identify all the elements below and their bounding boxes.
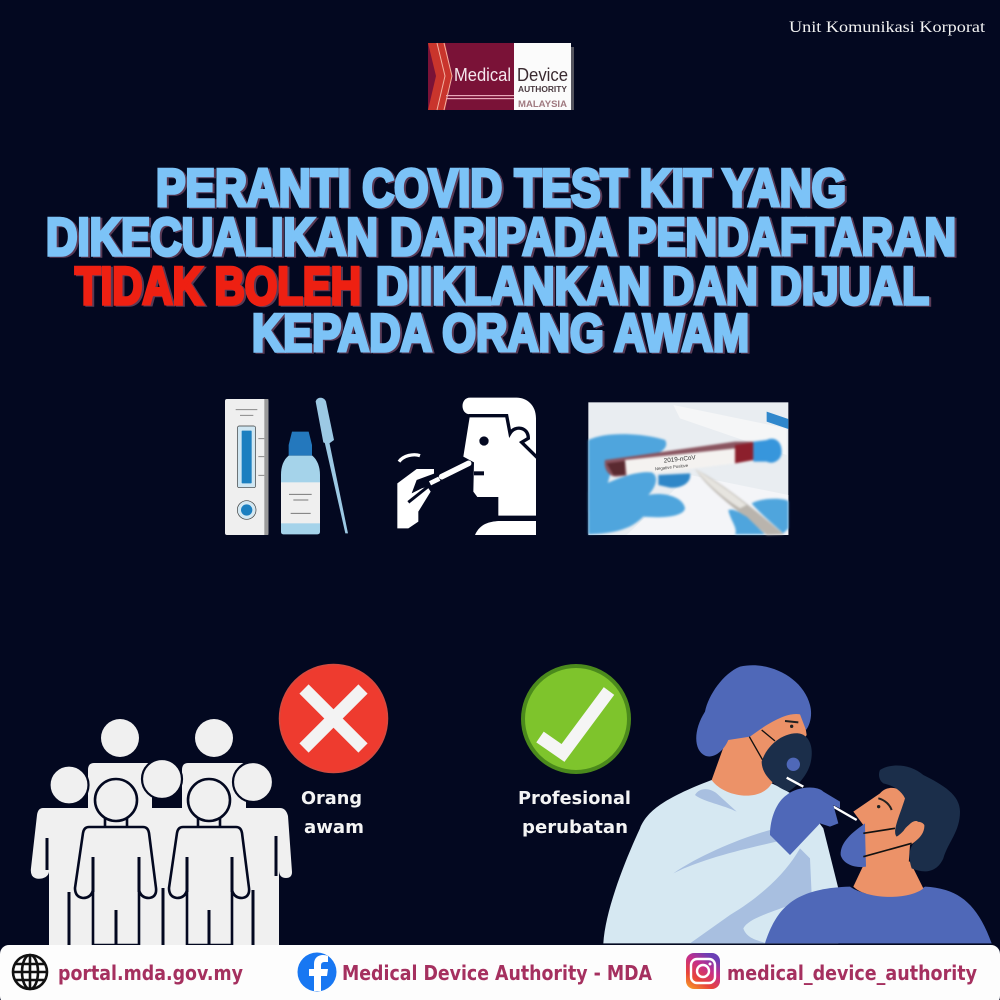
icon: group of people (public) — [31, 719, 292, 945]
footer bar — [0, 945, 1000, 1000]
front row people — [75, 779, 249, 945]
icon: person with nasal swab — [397, 398, 537, 535]
website text: portal.mda.gov.my — [58, 961, 243, 985]
icon: red cross — [280, 664, 388, 772]
medical professional — [603, 665, 857, 943]
logo: Medical Device Authority: MALAYSIA — [518, 99, 568, 109]
title — [46, 159, 956, 363]
label: Orang awam: Orang — [301, 788, 362, 809]
icon: test kit cassette, bottle and dropper — [225, 398, 348, 535]
icon: globe — [13, 955, 47, 989]
logo: Medical Device Authority: Device — [517, 65, 568, 85]
logo: Medical Device Authority — [428, 43, 574, 110]
photo: gloved hands holding 2019-nCoV blood tube — [588, 402, 788, 535]
header credit text: Unit Komunikasi Korporat — [789, 19, 986, 36]
title: PERANTI COVID TEST KIT YANG — [156, 159, 846, 218]
label: Orang awam — [301, 788, 364, 838]
icon: green check — [523, 666, 629, 772]
logo: Medical Device Authority: Medical — [454, 65, 511, 85]
title: TIDAK BOLEH — [75, 257, 361, 316]
label: Profesional perubatan: perubatan — [522, 817, 628, 838]
label: Profesional perubatan — [518, 788, 631, 838]
facebook text: Medical Device Authority - MDA — [342, 961, 652, 985]
label: Profesional perubatan: Profesional — [518, 788, 631, 809]
photo: gloved hands holding 2019-nCoV blood tube: 2019-nCoV — [663, 454, 697, 465]
middle row people — [31, 759, 292, 945]
patient — [765, 765, 992, 943]
title: KEPADA ORANG AWAM — [252, 304, 749, 363]
label: Orang awam: awam — [304, 817, 364, 838]
icon: facebook — [298, 952, 336, 992]
logo: Medical Device Authority: AUTHORITY — [518, 85, 568, 94]
icon: instagram — [686, 953, 720, 989]
photo: gloved hands holding 2019-nCoV blood tube: Negative Positive — [655, 463, 689, 471]
illustration: medical professional swabbing patient — [603, 665, 992, 943]
back row people — [88, 719, 246, 815]
